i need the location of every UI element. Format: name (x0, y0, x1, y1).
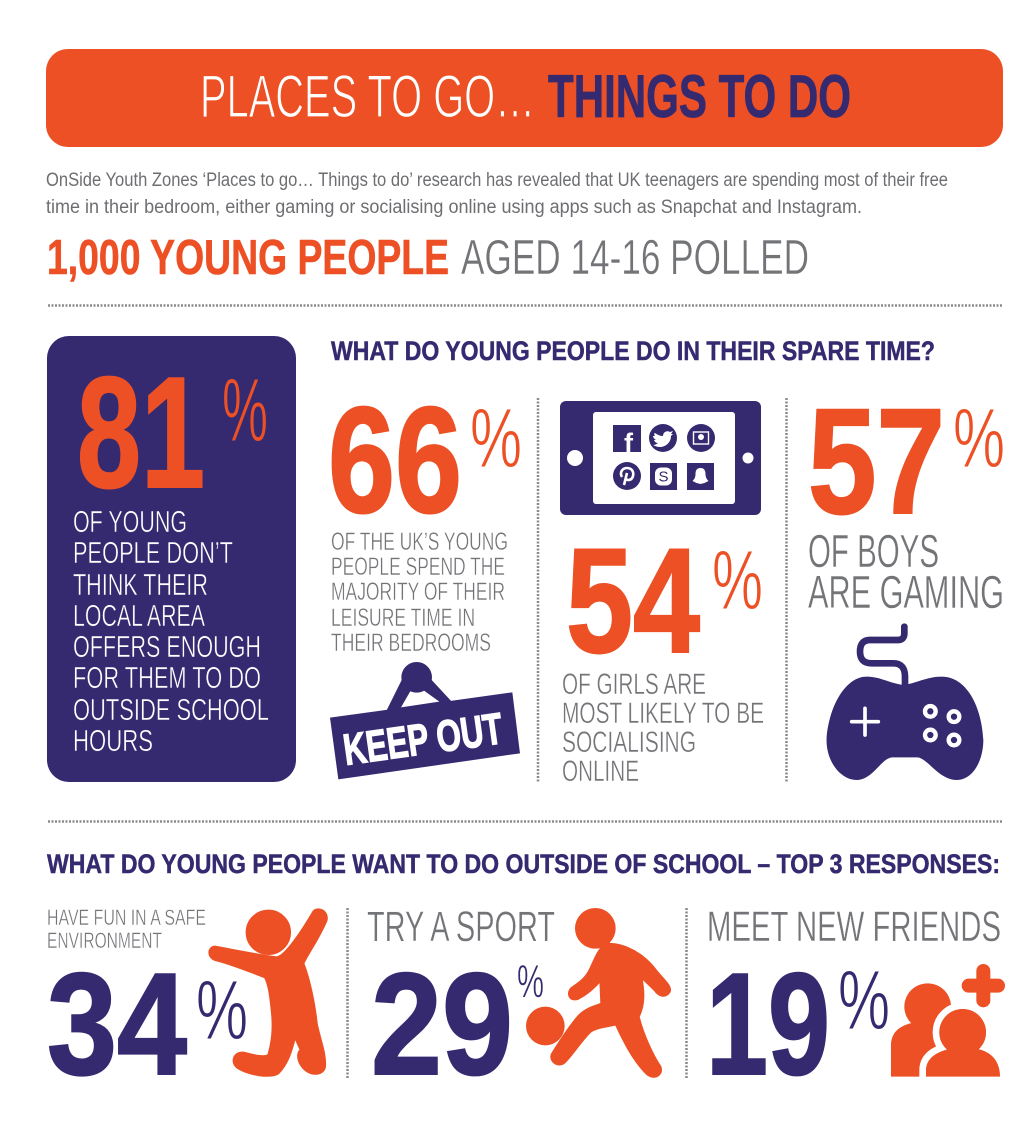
intro text: time in their bedroom, either gaming or socialising online using apps such as Snapchat and Instagram. (46, 197, 862, 218)
poll headline (47, 231, 809, 285)
icon: snapchat (687, 463, 714, 490)
stat: 66%: % (470, 391, 522, 485)
panel text: OUTSIDE SCHOOL (73, 692, 269, 727)
panel text (73, 504, 269, 758)
heading: spare time: WHAT DO YOUNG PEOPLE DO IN THEIR SPARE TIME? (331, 336, 935, 366)
response: have fun (47, 905, 327, 1105)
stat: 29%: % (517, 955, 544, 1007)
text: bedrooms: THEIR BEDROOMS (331, 629, 491, 657)
label: have fun: ENVIRONMENT (47, 928, 162, 953)
response: try a sport (367, 903, 670, 1105)
icon: twitter (649, 424, 677, 452)
text: bedrooms: MAJORITY OF THEIR (331, 578, 505, 606)
stat: 34%: 34 (47, 943, 187, 1105)
text: girls socialising: ONLINE (562, 755, 639, 788)
label: have fun (47, 905, 206, 953)
icon: jumping child (209, 909, 327, 1076)
icon: game controller (827, 627, 983, 780)
panel text: HOURS (73, 723, 153, 758)
stat: 54%: % (712, 533, 763, 627)
poll headline: 1,000 YOUNG PEOPLE (47, 231, 449, 285)
panel text: OF YOUNG (73, 504, 187, 539)
stat: 19%: % (838, 953, 890, 1047)
panel text: OFFERS ENOUGH (73, 629, 261, 664)
stat: 81%: 81 (77, 345, 205, 521)
icon: skype (650, 463, 677, 490)
icon: keep out sign (330, 662, 520, 779)
poll headline: AGED 14-16 POLLED (461, 231, 809, 285)
icon: facebook: f (624, 428, 634, 458)
stat: 66%: 66 (328, 375, 462, 544)
text: boys gaming (808, 525, 1004, 618)
stat: 34%: % (196, 963, 248, 1057)
response: meet new friends (706, 903, 1001, 1105)
stat: 81%: % (222, 361, 268, 461)
text: girls socialising: OF GIRLS ARE (562, 668, 706, 701)
stat: 54%: 54 (566, 517, 700, 684)
text: bedrooms: OF THE UK’S YOUNG (331, 528, 508, 556)
text: bedrooms: PEOPLE SPEND THE (331, 553, 505, 581)
text: girls socialising: MOST LIKELY TO BE (562, 697, 764, 730)
icon: tablet with social apps (560, 401, 761, 515)
panel: 81 percent (47, 336, 296, 782)
panel text: LOCAL AREA (73, 598, 205, 633)
icon: instagram (687, 424, 715, 452)
text: girls socialising: SOCIALISING (562, 726, 696, 759)
stat: 57%: % (953, 391, 1005, 485)
text: bedrooms (331, 528, 508, 657)
label: try a sport: TRY A SPORT (367, 903, 555, 951)
panel text: PEOPLE DON’T (73, 535, 233, 570)
icon: skype: S (658, 468, 669, 486)
icon: keep out sign: KEEP OUT (340, 704, 506, 775)
icon: pinterest (613, 462, 641, 490)
label: have fun: HAVE FUN IN A SAFE (47, 905, 206, 930)
intro text (46, 170, 948, 218)
text: girls socialising (562, 668, 764, 788)
icon: facebook (613, 425, 641, 458)
text: bedrooms: LEISURE TIME IN (331, 604, 475, 632)
stat: 57%: 57 (808, 377, 945, 545)
panel text: THINK THEIR (73, 567, 208, 602)
title banner (46, 49, 1003, 147)
text: boys gaming: OF BOYS (808, 525, 939, 577)
icon: add friend (891, 971, 1000, 1077)
title banner: PLACES TO GO… (200, 63, 535, 130)
title banner: THINGS TO DO (548, 63, 851, 130)
stat: 19%: 19 (706, 943, 830, 1105)
icon: child kicking ball (526, 908, 670, 1076)
panel text: FOR THEM TO DO (73, 660, 261, 695)
stat: 29%: 29 (371, 943, 513, 1105)
